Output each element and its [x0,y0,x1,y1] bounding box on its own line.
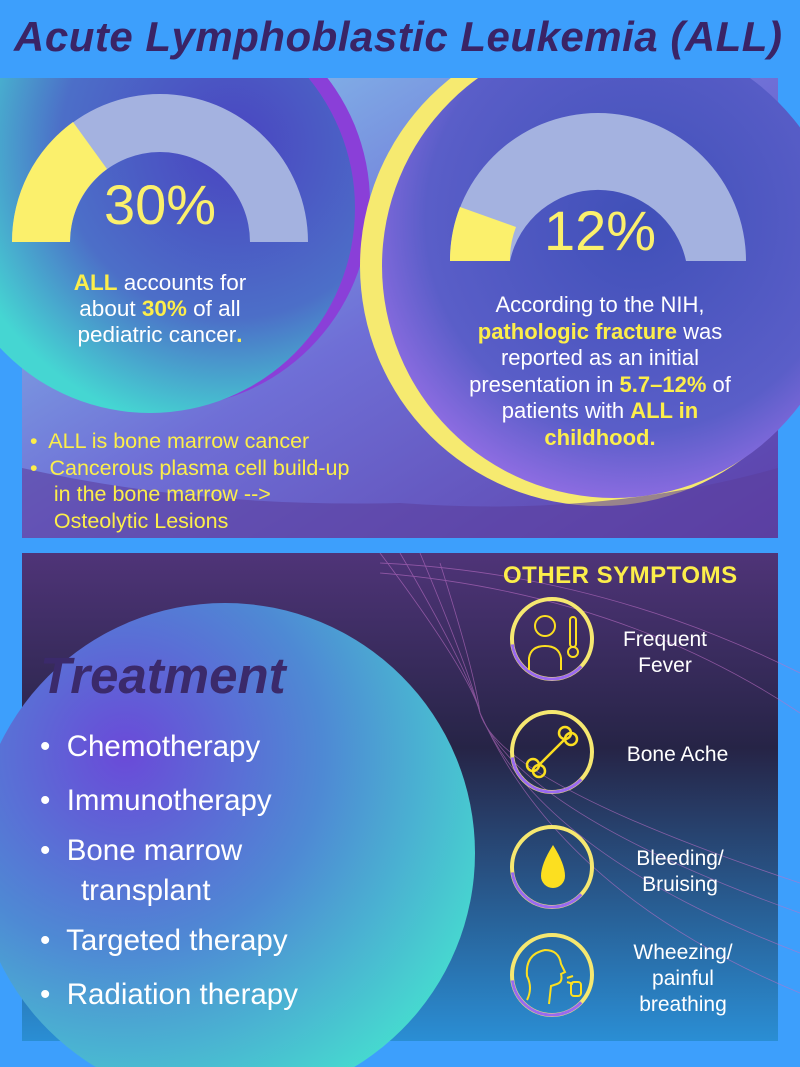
text: bleeding: Bruising [642,873,718,896]
bullet list: treatments: • Targeted therapy [40,924,288,957]
bullet list: treatments: • Immunotherapy [40,784,272,817]
text: wheezing: painful [652,967,714,990]
bullet list: facts: • ALL is bone marrow cancer [30,429,309,453]
text: NIH fact: According to the NIH, [495,292,705,317]
text: NIH fact [469,292,731,450]
text: bleeding [636,847,724,896]
icon: fever [510,597,594,681]
icon: blood drop [510,825,594,909]
bullet list: treatments: transplant [81,874,211,907]
heading: Treatment: Treatment [40,647,286,704]
icon: bone [510,710,594,794]
panel: statistics background [0,78,800,538]
bullet list: facts: in the bone marrow --> [54,482,271,506]
text: wheezing: breathing [639,993,727,1016]
text: NIH fact: pathologic fracture was [478,318,722,344]
heading: other symptoms: OTHER SYMPTOMS [503,562,738,589]
text: 12%: 12% [544,199,656,262]
text: bone ache: Bone Ache [627,743,728,766]
icon: breathing [510,933,594,1017]
bullet list: treatments: • Bone marrow [40,834,242,867]
bullet list: facts: • Cancerous plasma cell build-up [30,456,349,480]
text: NIH fact: reported as an initial [501,345,699,370]
text: NIH fact: childhood. [544,424,656,450]
title: Acute Lymphoblastic Leukemia (ALL) [14,13,782,60]
text: frequent fever: Frequent [623,628,707,651]
text: frequent fever: Fever [638,654,692,677]
gauge: 12% [450,113,746,261]
gauge: 30% [12,94,308,242]
text: NIH fact: presentation in 5.7–12% of [469,372,731,396]
panel: treatment & symptoms background [0,553,800,1067]
text: frequent fever [623,628,707,677]
bullet list: treatments: • Radiation therapy [40,978,298,1011]
text: wheezing: Wheezing/ [633,941,733,964]
bullet list: treatments: • Chemotherapy [40,730,260,763]
text: ALL accounts: about 30% of all [79,296,241,321]
text: wheezing [633,941,733,1016]
bullet list: facts: Osteolytic Lesions [54,508,228,532]
text: NIH fact: patients with ALL in [502,398,698,423]
text: 30%: 30% [104,173,216,236]
text: bleeding: Bleeding/ [636,847,724,870]
bullet list: facts [30,429,349,532]
text: ALL accounts [74,270,246,347]
text: ALL accounts: ALL accounts for [74,270,246,295]
bullet list: treatments [40,730,298,1011]
text: ALL accounts: pediatric cancer. [77,322,243,347]
